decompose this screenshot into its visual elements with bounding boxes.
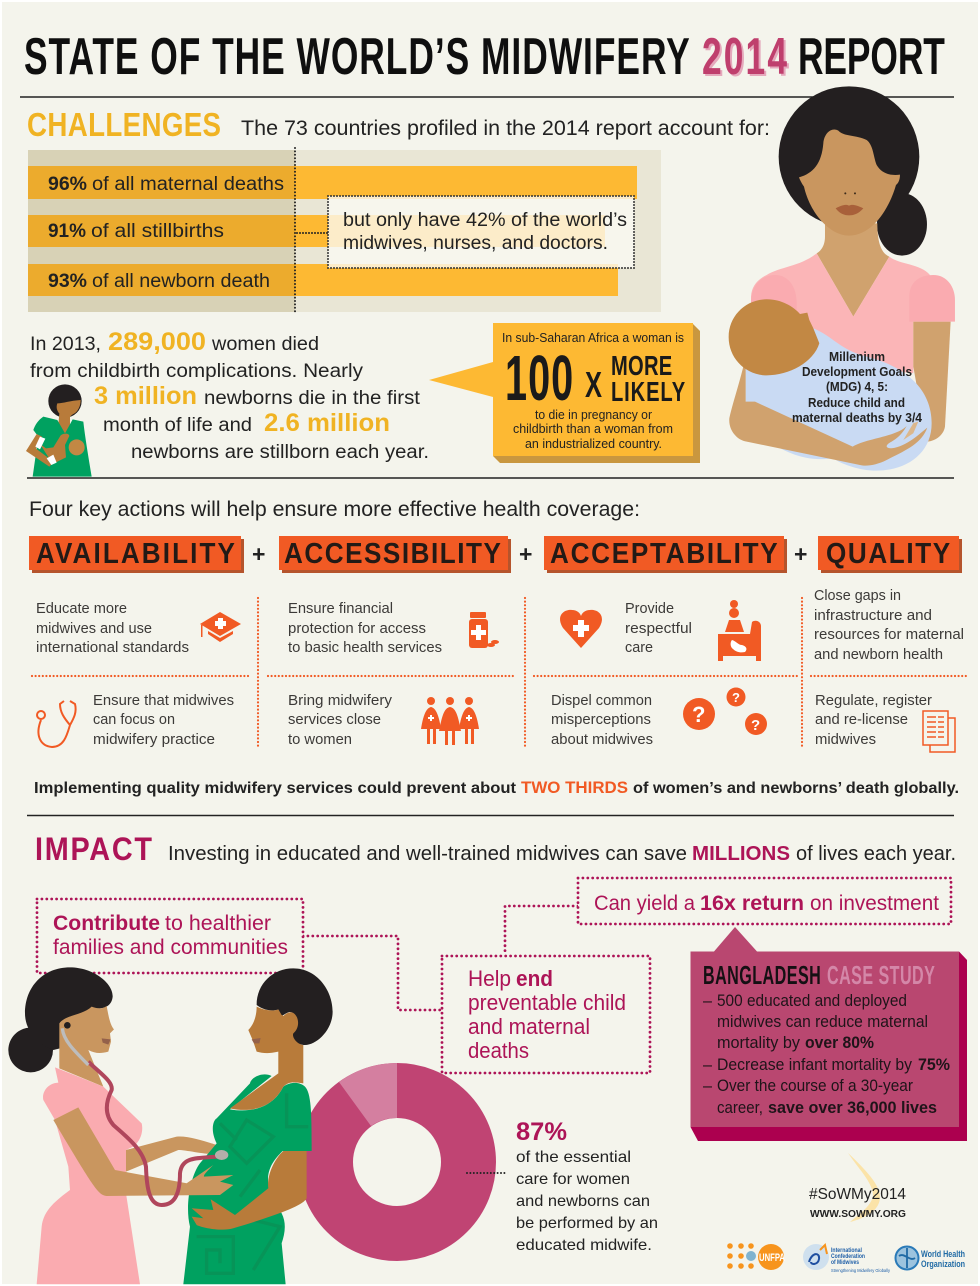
heading: impact: of lives each year. xyxy=(796,843,956,865)
text block: mortality statistics: 289,000 xyxy=(108,328,206,356)
logo: World Health Organization: World Health xyxy=(921,1249,965,1260)
action badges: QUALITY xyxy=(826,537,950,569)
bar chart: share of deaths: of all newborn death xyxy=(92,271,270,292)
text block: mortality statistics: 3 million xyxy=(94,382,197,410)
text block: 87 percent of essential care xyxy=(516,1118,658,1254)
text: two thirds statement xyxy=(34,779,959,797)
callout: 100x more likely: MORE xyxy=(611,351,672,382)
text block: millennium development goals: maternal deaths by 3/4 xyxy=(792,411,922,425)
text: two thirds statement: Implementing quality midwifery services could prevent about xyxy=(34,780,517,797)
logo: International Confederation of Midwives xyxy=(803,1244,891,1273)
logo: UNFPA: UNFPA xyxy=(759,1252,785,1264)
bar chart: share of deaths: 96% xyxy=(48,174,87,195)
title: 2014 xyxy=(704,30,789,88)
logo: International Confederation of Midwives: Confederation xyxy=(831,1254,865,1260)
callout: prevent deaths xyxy=(442,956,650,1073)
panel: challenges heading xyxy=(27,107,770,144)
text block: mortality statistics: from childbirth complications. Nearly xyxy=(30,361,364,382)
icon: documents xyxy=(923,711,955,752)
text block: mortality statistics: newborns die in the first xyxy=(204,388,421,409)
text block: millennium development goals: Millenium xyxy=(829,350,885,364)
bar chart: share of deaths: 91% xyxy=(48,221,86,242)
title xyxy=(24,28,945,88)
action badges: + xyxy=(519,541,532,567)
text: focus on midwifery: can focus on xyxy=(93,711,175,728)
text block: mortality statistics: In 2013, xyxy=(30,334,101,355)
icon: nurse and bed xyxy=(718,600,761,661)
panel: challenges heading: The 73 countries profiled in the 2014 report account for: xyxy=(241,117,770,140)
title: STATE OF THE WORLD’S MIDWIFERY xyxy=(24,28,690,86)
icon: question marks: ? xyxy=(692,702,705,727)
callout: 42 percent of workforce: but only have 42% of the world’s xyxy=(343,210,627,231)
callout: 100x more likely: to die in pregnancy or xyxy=(535,408,652,422)
callout: 100x more likely: LIKELY xyxy=(611,377,685,408)
panel: bangladesh case study: 75% xyxy=(918,1056,950,1074)
callout: 100x more likely: an industrialized country. xyxy=(525,437,662,451)
text: close gaps: infrastructure and xyxy=(814,607,932,624)
logo: World Health Organization: Organization xyxy=(921,1259,965,1270)
text block: 87 percent of essential care: 87% xyxy=(516,1118,567,1146)
text: services close to women: to women xyxy=(288,731,352,748)
illustration: midwife examining pregnant woman xyxy=(8,967,333,1284)
text: educate more midwives: Educate more xyxy=(36,600,127,617)
action badges: ACCESSIBILITY xyxy=(284,537,501,569)
action badges xyxy=(29,536,962,573)
text: regulate and license xyxy=(815,692,932,748)
text: regulate and license: and re-license xyxy=(815,711,908,728)
text: respectful care: care xyxy=(625,639,653,656)
text: focus on midwifery xyxy=(93,692,234,748)
panel: bangladesh case study: CASE STUDY xyxy=(827,960,935,990)
panel: bangladesh case study: Over the course of a 30-year xyxy=(717,1077,913,1095)
panel: bangladesh case study: BANGLADESH xyxy=(703,960,821,990)
bar chart: share of deaths: 93% xyxy=(48,271,87,292)
icon: stethoscope xyxy=(37,701,76,747)
callout: prevent deaths: and maternal xyxy=(468,1014,590,1039)
callout: 100x more likely xyxy=(429,323,700,463)
text: close gaps: and newborn health xyxy=(814,646,943,663)
callout: 100x more likely: childbirth than a woman from xyxy=(513,422,673,436)
text: services close to women: Bring midwifery xyxy=(288,692,393,709)
bar chart: share of deaths: of all stillbirths xyxy=(91,221,224,242)
text block: mortality statistics: women died xyxy=(211,334,319,355)
callout: prevent deaths: end xyxy=(516,966,553,991)
panel: challenges heading: CHALLENGES xyxy=(27,107,221,144)
text block: 87 percent of essential care: be performed by an xyxy=(516,1215,658,1232)
callout: prevent deaths: preventable child xyxy=(468,990,626,1015)
text: dispel misperceptions xyxy=(551,692,653,748)
panel: bangladesh case study: midwives can reduce maternal xyxy=(717,1013,928,1031)
text block: 87 percent of essential care: educated midwife. xyxy=(516,1237,652,1254)
panel: bangladesh case study xyxy=(690,927,967,1141)
text block: mortality statistics: month of life and xyxy=(103,415,252,436)
icon: question marks: ? xyxy=(732,690,740,705)
heading: impact: IMPACT xyxy=(35,832,152,867)
text: focus on midwifery: midwifery practice xyxy=(93,731,215,748)
callout: 100x more likely: X xyxy=(585,364,602,405)
text: educate more midwives: midwives and use xyxy=(36,620,152,637)
text: financial protection xyxy=(288,600,442,656)
text: respectful care: Provide xyxy=(625,600,674,617)
icon: question marks xyxy=(683,688,767,735)
bar chart: share of deaths: of all maternal deaths xyxy=(92,174,284,195)
callout: 100x more likely: In sub-Saharan Africa a woman is xyxy=(502,331,684,345)
callout: 16x return xyxy=(578,878,951,924)
callout: prevent deaths: Help xyxy=(468,966,511,991)
panel: bangladesh case study: 500 educated and deployed xyxy=(717,992,907,1010)
heading: impact xyxy=(35,832,956,867)
panel: bangladesh case study: – xyxy=(703,992,713,1010)
text: respectful care xyxy=(625,600,692,656)
text: close gaps: Close gaps in xyxy=(814,587,901,604)
text block: millennium development goals xyxy=(792,350,922,425)
callout: healthier families: families and communities xyxy=(53,936,288,959)
logo: International Confederation of Midwives: of Midwives xyxy=(831,1260,860,1266)
action badges: AVAILABILITY xyxy=(36,537,235,569)
action badges: ACCEPTABILITY xyxy=(550,537,778,569)
panel: bangladesh case study: mortality by xyxy=(717,1034,801,1052)
text: two thirds statement: of women’s and newborns’ death globally. xyxy=(633,780,959,797)
panel: bangladesh case study: save over 36,000 lives xyxy=(768,1099,937,1117)
callout: 100x more likely: 100 xyxy=(505,344,573,414)
icon: heart with cross xyxy=(560,610,602,648)
text: regulate and license: Regulate, register xyxy=(815,692,932,709)
bar chart: share of deaths xyxy=(28,148,661,314)
logo: UNFPA xyxy=(727,1243,785,1270)
callout: 16x return: on investment xyxy=(810,892,939,915)
action badges: + xyxy=(794,541,807,567)
text block: millennium development goals: Development Goals xyxy=(802,365,912,379)
text block: millennium development goals: Reduce child and xyxy=(808,396,905,410)
text: respectful care: respectful xyxy=(625,620,692,637)
text: financial protection: Ensure financial xyxy=(288,600,393,617)
donut chart: 87 percent xyxy=(326,1063,468,1234)
text: dispel misperceptions: Dispel common xyxy=(551,692,652,709)
text: educate more midwives: international standards xyxy=(36,639,189,656)
text block: millennium development goals: (MDG) 4, 5: xyxy=(826,380,888,394)
text block: mortality statistics xyxy=(30,328,429,463)
icon: graduation cap xyxy=(200,612,241,642)
icon: mother with baby xyxy=(26,384,92,477)
callout: 16x return: 16x return xyxy=(700,892,804,915)
icon: question marks: ? xyxy=(751,717,760,734)
heading: impact: Investing in educated and well-trained midwives can save xyxy=(168,843,687,865)
text: focus on midwifery: Ensure that midwives xyxy=(93,692,234,709)
icon: three women xyxy=(421,697,479,745)
text block: mortality statistics: 2.6 million xyxy=(264,409,390,437)
text block: 87 percent of essential care: and newborns can xyxy=(516,1193,650,1210)
title: REPORT xyxy=(798,28,945,86)
logo: International Confederation of Midwives: Strengthening Midwifery Globally xyxy=(831,1268,891,1273)
callout: 42 percent of workforce: midwives, nurses, and doctors. xyxy=(343,233,608,254)
text: close gaps: resources for maternal xyxy=(814,626,964,643)
heading: four key actions: Four key actions will help ensure more effective health coverage: xyxy=(29,498,640,521)
panel: bangladesh case study: – xyxy=(703,1077,713,1095)
footer: hashtag and website: WWW.SOWMY.ORG xyxy=(810,1208,906,1220)
text block: mortality statistics: newborns are stillborn each year. xyxy=(131,442,429,463)
logo: International Confederation of Midwives: International xyxy=(831,1248,862,1254)
callout: healthier families: Contribute xyxy=(53,912,160,935)
callout: 16x return: Can yield a xyxy=(594,892,695,915)
callout: healthier families: to healthier xyxy=(165,912,271,935)
text: services close to women: services close xyxy=(288,711,381,728)
panel: bangladesh case study: over 80% xyxy=(805,1034,874,1052)
footer: hashtag and website: #SoWMy2014 xyxy=(809,1186,906,1203)
panel: bangladesh case study: – xyxy=(703,1056,713,1074)
panel: bangladesh case study: Decrease infant mortality by xyxy=(717,1056,913,1074)
logo: World Health Organization xyxy=(896,1246,965,1270)
text block: 87 percent of essential care: care for women xyxy=(516,1171,630,1188)
text: services close to women xyxy=(288,692,393,748)
text: financial protection: protection for access xyxy=(288,620,426,637)
text block: 87 percent of essential care: of the essential xyxy=(516,1149,631,1166)
title: 2014 xyxy=(702,28,787,86)
footer: hashtag and website xyxy=(809,1153,906,1222)
text: dispel misperceptions: about midwives xyxy=(551,731,653,748)
text: educate more midwives xyxy=(36,600,189,656)
callout: healthier families xyxy=(37,899,303,973)
text: regulate and license: midwives xyxy=(815,731,876,748)
text: financial protection: to basic health services xyxy=(288,639,442,656)
callout: 42 percent of workforce xyxy=(328,196,634,268)
panel: bangladesh case study: career, xyxy=(717,1099,763,1117)
text: dispel misperceptions: misperceptions xyxy=(551,711,651,728)
action badges: + xyxy=(252,541,265,567)
text: two thirds statement: TWO THIRDS xyxy=(521,779,628,797)
heading: impact: MILLIONS xyxy=(692,843,790,865)
illustration: mother and newborn xyxy=(729,86,955,471)
callout: prevent deaths: deaths xyxy=(468,1038,529,1063)
text: close gaps xyxy=(814,587,964,663)
icon: pill bottle xyxy=(469,612,499,648)
